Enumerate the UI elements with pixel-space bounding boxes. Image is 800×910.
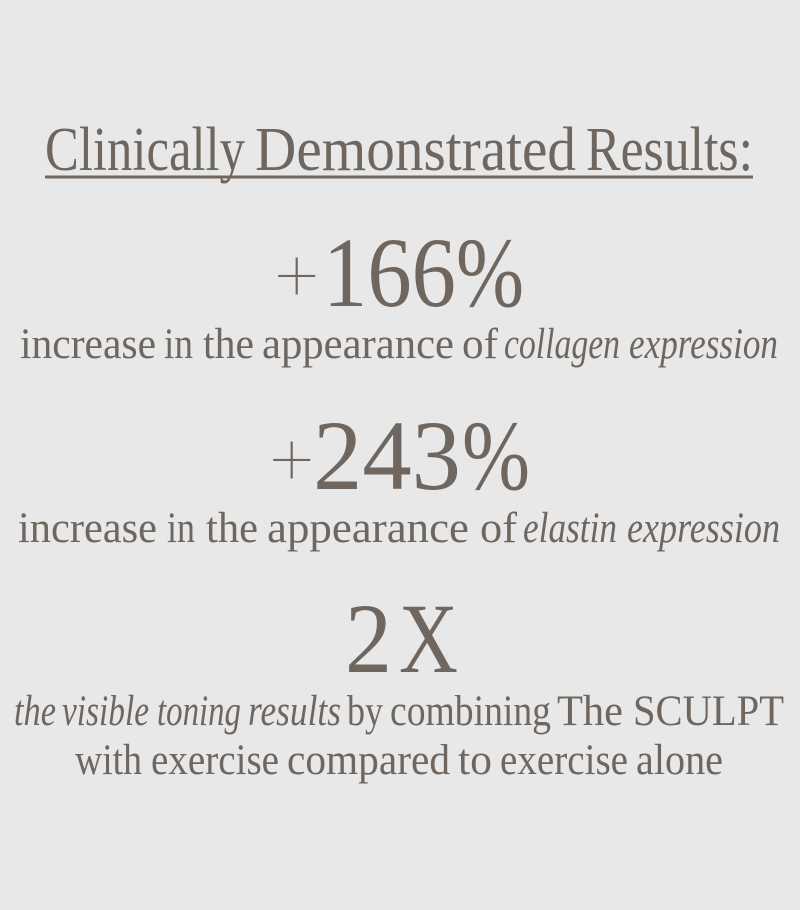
caption: toning results: visible [62,688,149,735]
caption: collagen expression: of [462,321,499,368]
caption: toning results: to [458,737,492,784]
caption: toning results: alone [636,737,723,784]
title [45,116,753,184]
caption: toning results: compared [287,737,450,784]
caption: toning results: results [248,688,341,735]
stat: +243%: + [268,414,315,507]
caption: toning results [14,688,784,784]
caption: elastin expression: the [206,505,258,552]
caption: elastin expression: elastin [523,505,617,552]
caption: toning results: combining [390,688,551,735]
stat: +166%: 166 [323,217,456,328]
caption: toning results: the [14,688,56,735]
caption: collagen expression: collagen [504,321,620,368]
caption: collagen expression: increase [20,321,156,368]
stat: +243%: % [462,400,530,511]
caption: elastin expression: in [167,505,195,552]
title: Clinically [45,116,245,184]
caption: toning results: SCULPT [633,688,784,735]
caption: collagen expression: in [164,321,193,368]
caption: toning results: by [347,688,383,735]
caption: collagen expression [20,321,778,368]
title: Results: [586,116,753,184]
caption: toning results: exercise [151,737,279,784]
stat: +243%: 243 [313,400,461,511]
caption: toning results: exercise [500,737,628,784]
caption: toning results: with [75,737,142,784]
stat: 2X [345,583,458,694]
caption: elastin expression [18,505,780,552]
stat: +166% [273,217,524,328]
caption: toning results: The [557,688,623,735]
caption: elastin expression: increase [18,505,157,552]
caption: collagen expression: appearance [262,321,454,368]
caption: elastin expression: of [480,505,518,552]
caption: collagen expression: the [203,321,254,368]
stat: +166%: + [273,230,320,323]
stat: +166%: % [456,217,524,328]
caption: toning results: toning [157,688,241,735]
stat: 2X: 2 [345,583,392,694]
stat: 2X: X [399,583,458,694]
title: Demonstrated [255,116,576,184]
stat: +243% [268,400,530,511]
caption: elastin expression: appearance [267,505,469,552]
